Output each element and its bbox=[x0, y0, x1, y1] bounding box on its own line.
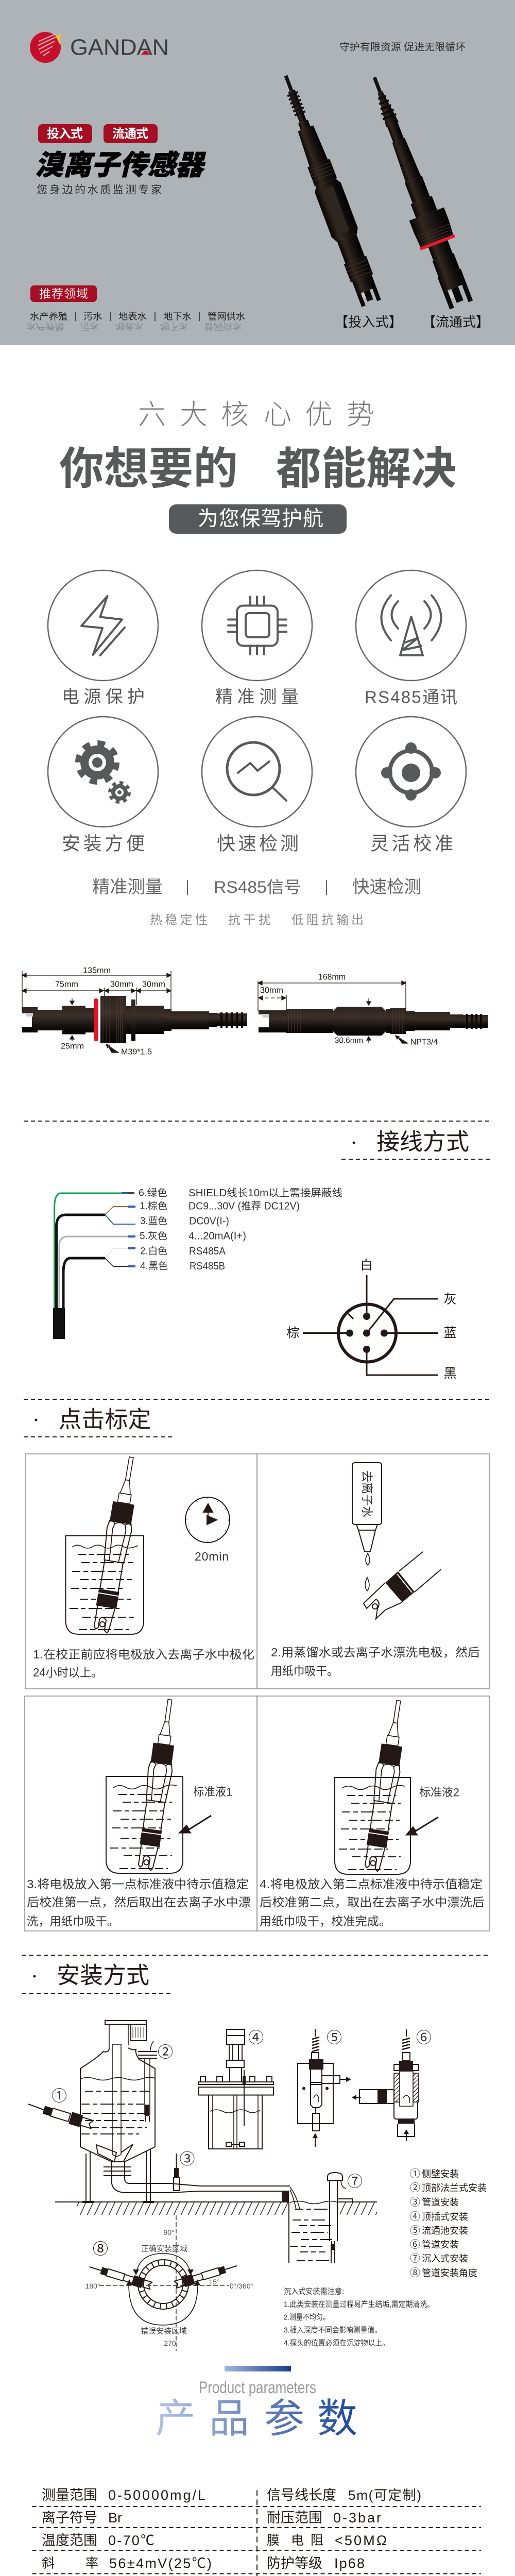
connector pinout diagram: 棕 bbox=[286, 1326, 300, 1341]
installation legend: ⑦ bbox=[410, 2252, 420, 2264]
badge: recommended fields: 推荐领域 bbox=[39, 287, 88, 300]
installation notes: 3.插入深度不同会影响测量值。 bbox=[284, 2326, 382, 2335]
field list reflection: 管网供水 bbox=[203, 321, 243, 332]
installation legend: 流通池安装 bbox=[422, 2226, 468, 2236]
sensor mount 2: top flange bbox=[138, 2041, 157, 2122]
product image: flow-through sensor bbox=[357, 71, 478, 312]
field list reflection: 地表水 bbox=[114, 321, 144, 332]
feature summary line: 精准测量 bbox=[92, 877, 163, 897]
step 4 text: 后校准第二点，取出在去离子水中漂洗后 bbox=[260, 1895, 485, 1909]
application field list: 污水 bbox=[83, 311, 102, 321]
dimension labels: 30mm bbox=[260, 985, 283, 995]
dimension labels: 30mm bbox=[110, 980, 133, 989]
icon: lightning bolt bbox=[81, 596, 125, 655]
icon: gears bbox=[79, 744, 129, 802]
panel: calibration step 1 bbox=[25, 1454, 257, 1689]
feature summary line: 快速检测 bbox=[352, 877, 421, 897]
installation legend: ⑤ bbox=[410, 2225, 420, 2236]
dimension labels: 75mm bbox=[55, 980, 78, 989]
installation legend: ⑧ bbox=[410, 2267, 420, 2279]
dimension labels: 30mm bbox=[142, 980, 165, 989]
row: slope / protection grade bbox=[42, 2555, 365, 2571]
badge: 流通式 bbox=[104, 124, 158, 143]
dimension labels: 168mm bbox=[318, 972, 346, 982]
feature sub line: 抗干扰 bbox=[228, 913, 271, 927]
arrow bbox=[180, 1816, 211, 1833]
panel: easy installation bbox=[48, 717, 158, 854]
wiring table labels: DC0V(I-) bbox=[189, 1216, 229, 1227]
connector pinout diagram bbox=[286, 1258, 457, 1381]
row: slope / protection grade: 率 bbox=[85, 2556, 98, 2571]
pill subtitle: 为您保驾护航 bbox=[198, 507, 323, 530]
beaker with electrode bbox=[335, 1699, 410, 1874]
angle labels: ⑧ bbox=[93, 2241, 108, 2258]
label: 电源保护 bbox=[62, 687, 145, 707]
wiring table labels: DC9...30V (推荐 DC12V) bbox=[188, 1200, 300, 1212]
row: temperature / membrane resistance: 电 bbox=[291, 2533, 304, 2548]
panel: fast detection bbox=[202, 717, 312, 854]
feature sub line: 低阻抗输出 bbox=[291, 913, 364, 927]
dimension diagram: immersion sensor bbox=[258, 972, 488, 1047]
icon: chip bbox=[228, 597, 286, 654]
chinese title: 产品参数 bbox=[155, 2396, 357, 2441]
badge: 流通式: 流通式 bbox=[112, 127, 148, 141]
angle labels: 0°/360° bbox=[230, 2282, 253, 2290]
panel: calibration step 4 bbox=[257, 1696, 489, 1931]
ground and pipeline bbox=[55, 2162, 377, 2215]
wiring table labels: RS485A bbox=[189, 1246, 226, 1257]
wiring table labels: 3.蓝色 bbox=[140, 1215, 167, 1227]
step 1 text: 24小时以上。 bbox=[33, 1666, 102, 1679]
installation legend: 管道安装角度 bbox=[422, 2268, 477, 2278]
number 3: ③ bbox=[179, 2151, 195, 2168]
row: temperature / membrane resistance: 膜 bbox=[267, 2533, 280, 2548]
installation notes bbox=[284, 2286, 434, 2347]
badge: 投入式: 投入式 bbox=[47, 127, 83, 141]
row: ion symbol / pressure bbox=[42, 2510, 381, 2526]
row: ion symbol / pressure: 0-3bar bbox=[333, 2510, 381, 2526]
angle labels: 错误安装区域 bbox=[141, 2327, 187, 2336]
panel: power protection bbox=[48, 570, 158, 707]
section heading: calibration: 点击标定 bbox=[59, 1406, 151, 1432]
row: temperature / membrane resistance: 0-70℃ bbox=[108, 2533, 154, 2548]
number 2: ② bbox=[158, 2044, 173, 2061]
dimension diagram: flow-through sensor bbox=[22, 967, 247, 1056]
product title: 溴离子传感器 bbox=[35, 150, 207, 181]
step 3 text: 后校准第一点，然后取出在去离子水中漂 bbox=[27, 1895, 251, 1909]
dimension labels: 25mm bbox=[61, 1042, 84, 1051]
dimension labels bbox=[260, 972, 438, 1047]
sensor body bbox=[259, 1007, 488, 1036]
panel: calibration step 2 bbox=[257, 1454, 489, 1689]
angle labels: 正确安装区域 bbox=[141, 2244, 187, 2253]
beaker with electrode bbox=[66, 1455, 144, 1634]
installation legend: 管道安装 bbox=[422, 2240, 459, 2250]
installation legend: 管道安装 bbox=[422, 2197, 459, 2208]
feature sub line bbox=[150, 913, 364, 927]
feature summary line bbox=[92, 877, 421, 897]
icon: GANDAN logo mark bbox=[30, 32, 61, 63]
installation legend: 沉入式安装 bbox=[422, 2253, 468, 2264]
label: 快速检测 bbox=[217, 833, 299, 854]
row: measuring range / cable length: 测量范围 bbox=[42, 2487, 97, 2503]
icon: clock bbox=[185, 1497, 230, 1543]
dimension labels: M39*1.5 bbox=[121, 1048, 152, 1056]
label: standard solution 1: 标准液1 bbox=[193, 1786, 232, 1798]
sensor mount 3: pipe bbox=[174, 2154, 179, 2191]
dimension labels: 30.6mm bbox=[335, 1037, 363, 1045]
headline bbox=[59, 444, 456, 494]
parameters table bbox=[32, 2487, 486, 2576]
label: 精准测量 bbox=[215, 687, 299, 707]
icon: magnifier bbox=[227, 742, 286, 801]
pill subtitle bbox=[169, 504, 347, 534]
icon: antenna bbox=[381, 596, 441, 655]
installation notes: 4.探头的位置必须在沉淀物以上。 bbox=[284, 2339, 389, 2347]
installation notes: 沉入式安装需注意: bbox=[284, 2286, 344, 2296]
dimension labels: NPT3/4 bbox=[410, 1038, 438, 1047]
row: measuring range / cable length bbox=[42, 2487, 421, 2503]
application field list: 地表水 bbox=[118, 311, 147, 321]
field list reflection: 污水 bbox=[79, 321, 100, 332]
angle labels: 180° bbox=[85, 2282, 100, 2290]
diagram: pipe installation angle bbox=[85, 2215, 253, 2351]
sensor mount 7: immersion in pit bbox=[289, 2173, 352, 2263]
wash bottle bbox=[352, 1463, 382, 1552]
dimension labels: 135mm bbox=[83, 967, 111, 975]
section heading: product parameters bbox=[155, 2366, 357, 2441]
application field list: 地下水 bbox=[163, 311, 192, 321]
label: 安装方便 bbox=[62, 833, 145, 854]
sensor body bbox=[22, 996, 247, 1043]
sensor mount 1: side wall bbox=[28, 2104, 94, 2130]
installation legend: ① bbox=[410, 2168, 420, 2180]
application field list: 水产养殖 bbox=[30, 311, 67, 321]
number 4: ④ bbox=[248, 2030, 264, 2046]
badge: 投入式 bbox=[38, 124, 92, 143]
wiring table labels: 4...20mA(I+) bbox=[188, 1230, 246, 1242]
product image: immersion sensor bbox=[273, 71, 384, 308]
caption: 投入式: 【投入式】 bbox=[335, 314, 402, 330]
sensor mount 4: top insertion bbox=[199, 2029, 273, 2149]
label: standard solution 2: 标准液2 bbox=[419, 1786, 459, 1799]
english kicker: Product parameters bbox=[199, 2378, 316, 2397]
headline: 你想要的 bbox=[59, 444, 238, 494]
number 5: ⑤ bbox=[327, 2030, 342, 2046]
section heading: wiring: 接线方式 bbox=[376, 1128, 469, 1155]
label: RS485通讯 bbox=[365, 687, 457, 707]
feature sub line: 热稳定性 bbox=[150, 913, 208, 927]
timer label: 20min bbox=[195, 1550, 229, 1563]
step 3 text: 3.将电极放入第一点标准液中待示值稳定 bbox=[27, 1877, 249, 1891]
step 1 text bbox=[33, 1648, 254, 1679]
wiring table labels: SHIELD线长10m以上需接屏蔽线 bbox=[188, 1187, 342, 1199]
angle labels: 15° bbox=[209, 2278, 220, 2286]
tank bbox=[80, 2021, 155, 2203]
wiring table labels: 4.黑色 bbox=[140, 1260, 168, 1272]
step 1 text: 1.在校正前应将电极放入去离子水中极化 bbox=[33, 1648, 254, 1661]
water drops bbox=[365, 1553, 370, 1591]
wiring table labels: 6.绿色 bbox=[139, 1187, 167, 1198]
field list reflection: 地下水 bbox=[159, 321, 189, 332]
installation legend: ⑥ bbox=[410, 2239, 420, 2250]
panel: calibration step 3 bbox=[25, 1696, 257, 1931]
installation notes: 2.测量不均匀。 bbox=[284, 2313, 330, 2321]
panel: RS485 communication bbox=[356, 570, 466, 707]
row: temperature / membrane resistance bbox=[42, 2533, 387, 2548]
field list reflection bbox=[26, 321, 243, 332]
installation legend: 侧壁安装 bbox=[422, 2169, 459, 2179]
angle labels: 90° bbox=[163, 2228, 175, 2236]
panel: flexible calibration bbox=[356, 717, 466, 854]
wiring table labels: 5.灰色 bbox=[140, 1230, 167, 1242]
wiring diagram: cable bbox=[53, 1193, 135, 1339]
installation notes: 1.此类安装在测量过程易产生结垢,需定期清洗。 bbox=[284, 2300, 434, 2309]
row: temperature / membrane resistance: 温度范围 bbox=[42, 2533, 97, 2548]
row: ion symbol / pressure: 耐压范围 bbox=[267, 2510, 322, 2526]
row: temperature / membrane resistance: 阻 bbox=[311, 2533, 323, 2548]
application field list bbox=[30, 311, 245, 321]
wiring table labels: 1.棕色 bbox=[140, 1200, 167, 1212]
connector pinout diagram: 灰 bbox=[443, 1292, 457, 1307]
step 2 text bbox=[271, 1646, 480, 1677]
installation legend: 顶部法兰式安装 bbox=[422, 2183, 487, 2193]
step 2 text: 2.用蒸馏水或去离子水漂洗电极，然后 bbox=[271, 1646, 480, 1659]
row: ion symbol / pressure: Br bbox=[108, 2510, 122, 2526]
label: 灵活校准 bbox=[370, 833, 453, 854]
icon: calibration knob bbox=[381, 742, 441, 801]
wiring table labels bbox=[139, 1187, 342, 1272]
row: measuring range / cable length: 5m(可定制) bbox=[348, 2487, 421, 2503]
step 3 text bbox=[27, 1877, 251, 1928]
arrow bbox=[407, 1817, 438, 1835]
step 4 text bbox=[260, 1877, 485, 1928]
connector pinout diagram: 黑 bbox=[443, 1366, 457, 1381]
diagram: reactor tank with side, top and pipe mounts bbox=[28, 2021, 432, 2263]
row: measuring range / cable length: 0-50000mg/L bbox=[108, 2487, 205, 2503]
number 1: ① bbox=[52, 2088, 67, 2105]
installation legend: ④ bbox=[410, 2211, 420, 2223]
section heading: six core advantages bbox=[59, 399, 456, 534]
row: slope / protection grade: Ip68 bbox=[334, 2555, 365, 2571]
row: slope / protection grade: 防护等级 bbox=[267, 2555, 322, 2571]
sensor mount 5: flow cell bbox=[298, 2029, 351, 2147]
step 3 text: 洗，用纸巾吸干。 bbox=[27, 1914, 118, 1928]
beaker with electrode bbox=[106, 1698, 183, 1873]
badge: recommended fields bbox=[30, 285, 97, 302]
installation legend: ③ bbox=[410, 2196, 420, 2208]
field list reflection: 水产养殖 bbox=[26, 321, 65, 332]
installation legend bbox=[410, 2168, 487, 2279]
electrode tip bbox=[364, 1552, 441, 1619]
sensor mount 6: pipe tee bbox=[352, 2029, 419, 2141]
step 4 text: 用纸巾吸干，校准完成。 bbox=[260, 1914, 391, 1928]
row: measuring range / cable length: 信号线长度 bbox=[267, 2487, 336, 2503]
row: slope / protection grade: 斜 bbox=[42, 2556, 55, 2571]
caption: 流通式: 【流通式】 bbox=[422, 314, 489, 330]
wiring table labels: RS485B bbox=[190, 1261, 225, 1272]
feature summary line: RS485信号 bbox=[214, 878, 301, 896]
kicker: 六大核心优势 bbox=[138, 399, 374, 430]
row: slope / protection grade: 56±4mV(25℃) bbox=[109, 2555, 212, 2571]
dimension lines bbox=[258, 981, 408, 1043]
number 6: ⑥ bbox=[416, 2030, 432, 2046]
headline: 都能解决 bbox=[276, 444, 456, 494]
step 4 text: 4.将电极放入第二点标准液中待示值稳定 bbox=[260, 1877, 483, 1891]
connector pinout diagram: 白 bbox=[360, 1258, 373, 1273]
subtitle: 您身边的水质监测专家 bbox=[37, 184, 162, 196]
angle labels: 270 bbox=[164, 2339, 176, 2347]
dimension lines bbox=[22, 971, 171, 1053]
installation legend: ② bbox=[410, 2182, 420, 2194]
installation legend: 顶插式安装 bbox=[422, 2212, 468, 2222]
panel: hero banner bbox=[0, 0, 515, 345]
section heading: installation: 安装方式 bbox=[57, 1962, 149, 1989]
logo wordmark: GANDAN bbox=[70, 35, 169, 60]
wiring table labels: 2.白色 bbox=[140, 1246, 167, 1257]
row: ion symbol / pressure: 离子符号 bbox=[42, 2510, 97, 2526]
number 7: ⑦ bbox=[347, 2173, 363, 2191]
wash bottle: 去离子水 bbox=[360, 1470, 374, 1518]
panel: accurate measurement bbox=[202, 570, 312, 707]
application field list: 管网供水 bbox=[208, 311, 245, 321]
angle labels bbox=[85, 2228, 253, 2347]
step 2 text: 用纸巾吸干。 bbox=[271, 1664, 338, 1677]
dimension labels bbox=[55, 967, 165, 1056]
row: temperature / membrane resistance: <50MΩ bbox=[335, 2533, 387, 2548]
connector pinout diagram: 蓝 bbox=[443, 1326, 457, 1341]
slogan: 守护有限资源 促进无限循环 bbox=[339, 41, 466, 53]
